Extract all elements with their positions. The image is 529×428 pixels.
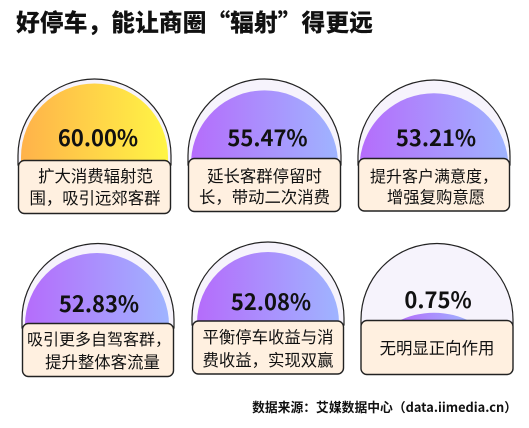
panel: 60.00%: 60.00% bbox=[58, 121, 138, 153]
panel: 52.83%: 52.83% bbox=[59, 287, 139, 319]
panel: 52.83% bbox=[22, 244, 174, 376]
panel: 0.75% bbox=[361, 244, 513, 374]
panel: 52.83%: 吸引更多自驾客群， bbox=[27, 326, 171, 350]
panel: 52.08%: 52.08% bbox=[231, 285, 311, 317]
panel: 55.47%: 长，带动二次消费 bbox=[199, 184, 330, 208]
panel: 55.47% bbox=[188, 79, 341, 212]
panel: 0.75%: 无明显正向作用 bbox=[380, 335, 494, 359]
panel: 0.75%: 0.75% bbox=[404, 283, 472, 315]
panel: 53.21%: 53.21% bbox=[396, 121, 476, 153]
panel: 53.21% bbox=[358, 80, 510, 211]
panel: 60.00% bbox=[18, 79, 171, 214]
title: 好停车，能让商圈“辐射”得更远 bbox=[16, 3, 373, 38]
panel: 55.47%: 延长客群停留时 bbox=[207, 163, 322, 187]
panel: 60.00%: 扩大消费辐射范 bbox=[38, 163, 153, 187]
panel: 60.00%: 围，吸引远郊客群 bbox=[29, 185, 161, 209]
panel: 52.83%: 提升整体客流量 bbox=[45, 349, 160, 373]
panel: 53.21%: 提升客户满意度， bbox=[370, 163, 498, 187]
source: 数据来源：艾媒数据中心（data.iimedia.cn） bbox=[252, 397, 517, 416]
panel: 52.08%: 费收益，实现双赢 bbox=[202, 347, 334, 371]
panel: 55.47%: 55.47% bbox=[227, 121, 308, 153]
panel: 53.21%: 增强复购意愿 bbox=[387, 184, 485, 208]
panel: 52.08% bbox=[192, 242, 344, 374]
panel: 52.08%: 平衡停车收益与消 bbox=[202, 324, 334, 348]
